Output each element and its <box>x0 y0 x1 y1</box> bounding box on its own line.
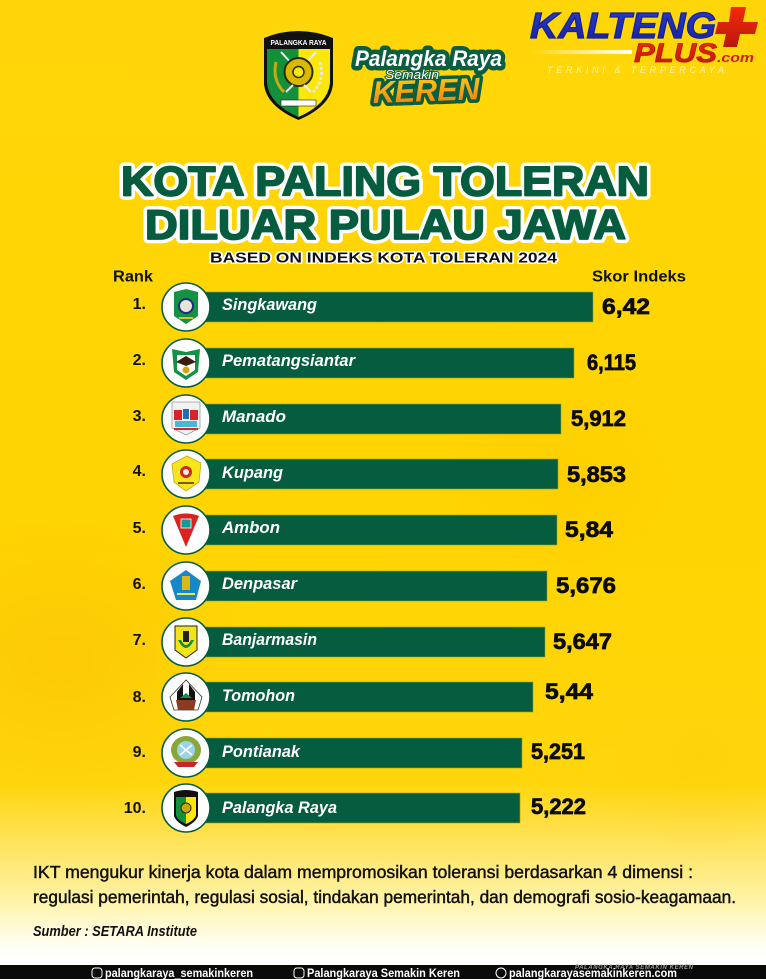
emblem: Banjarmasin <box>175 626 197 658</box>
logo: Palangka Raya Semakin Keren <box>355 46 502 110</box>
logo: Palangka Raya city shield: PALANGKA RAYA <box>270 38 327 47</box>
title: KOTA PALING TOLERAN <box>121 158 649 204</box>
row 2: Pematangsiantar <box>133 339 636 387</box>
logo: Palangka Raya Semakin Keren: Semakin <box>385 67 439 82</box>
row 8: Tomohon: 8. <box>133 689 146 706</box>
logo: Kalteng Plus: KALTENG <box>530 5 716 46</box>
row 8: Tomohon: 5,44 <box>545 679 594 704</box>
row 4: Kupang: 4. <box>133 463 146 480</box>
footer bar <box>0 965 766 979</box>
row 9: Pontianak: 9. <box>133 744 146 761</box>
ghost watermark: PALANGKA RAYA SEMAKIN KEREN <box>575 965 694 971</box>
row 7: Banjarmasin: Banjarmasin <box>222 631 317 649</box>
source: Sumber : SETARA Institute <box>33 924 197 940</box>
row 6: Denpasar: 6. <box>133 576 146 593</box>
row 2: Pematangsiantar: Pematangsiantar <box>222 352 357 370</box>
emblem: Pematangsiantar <box>172 349 200 380</box>
row 10: Palangka Raya: 5,222 <box>531 794 586 819</box>
row 9: Pontianak <box>133 729 585 777</box>
row 7: Banjarmasin: 5,647 <box>553 629 612 654</box>
row 2: Pematangsiantar: 6,115 <box>587 350 636 375</box>
emblem: Manado <box>172 402 200 435</box>
row 5: Ambon: Ambon <box>221 519 280 537</box>
row 4: Kupang: 5,853 <box>567 462 626 487</box>
row 4: Kupang: Kupang <box>222 464 283 482</box>
column header: rank: Rank <box>113 268 153 286</box>
row 8: Tomohon <box>133 673 594 721</box>
logo: Palangka Raya city shield <box>264 31 333 120</box>
row 4: Kupang <box>133 450 626 498</box>
emblem: Tomohon <box>170 680 202 710</box>
row 1: Singkawang: Singkawang <box>222 296 317 314</box>
row 6: Denpasar <box>133 562 616 610</box>
logo: Kalteng Plus <box>530 5 758 75</box>
row 3: Manado <box>133 395 626 443</box>
logo: Palangka Raya Semakin Keren: Palangka Raya <box>355 46 502 71</box>
icon: website <box>496 968 506 978</box>
row 9: Pontianak: 5,251 <box>531 739 585 764</box>
row 10: Palangka Raya <box>124 784 586 832</box>
icon: facebook <box>294 968 304 978</box>
row 1: Singkawang <box>133 283 650 331</box>
emblem: Denpasar <box>170 570 201 600</box>
row 10: Palangka Raya: 10. <box>124 800 146 817</box>
row 1: Singkawang: 1. <box>133 296 146 313</box>
logo: Kalteng Plus: PLUS <box>634 38 717 68</box>
title: DILUAR PULAU JAWA <box>145 201 626 248</box>
emblem: Ambon <box>173 514 199 547</box>
logo: Kalteng Plus: TERKINI & TERPERCAYA <box>547 65 724 75</box>
logo: Kalteng Plus: .com <box>717 50 755 65</box>
subtitle: BASED ON INDEKS KOTA TOLERAN 2024 <box>210 250 557 266</box>
row 10: Palangka Raya: Palangka Raya <box>222 799 337 817</box>
row 6: Denpasar: 5,676 <box>556 573 616 598</box>
row 2: Pematangsiantar: 2. <box>133 352 146 369</box>
emblem: Singkawang <box>174 289 198 324</box>
row 3: Manado: 3. <box>133 408 146 425</box>
logo: Palangka Raya Semakin Keren: KEREN <box>372 71 481 110</box>
row 5: Ambon: 5,84 <box>565 517 614 542</box>
title: KOTA PALING TOLERAN <box>121 158 649 204</box>
row 3: Manado: 5,912 <box>571 406 626 431</box>
row 5: Ambon <box>133 506 614 554</box>
emblem: Kupang <box>172 456 201 491</box>
explanation text <box>33 862 736 907</box>
icon: instagram <box>92 968 102 978</box>
row 7: Banjarmasin <box>133 618 612 666</box>
row 1: Singkawang: 6,42 <box>602 294 650 319</box>
column header: score: Skor Indeks <box>592 268 686 286</box>
row 3: Manado: Manado <box>222 408 286 426</box>
row 6: Denpasar: Denpasar <box>222 575 299 593</box>
row 8: Tomohon: Tomohon <box>222 687 295 705</box>
title: DILUAR PULAU JAWA <box>145 201 626 248</box>
row 9: Pontianak: Pontianak <box>222 743 301 761</box>
row 5: Ambon: 5. <box>133 520 146 537</box>
explanation text: regulasi pemerintah, regulasi sosial, tindakan pemerintah, dan demografi sosio-keagamaan. <box>33 887 736 907</box>
emblem: Pontianak <box>171 736 201 767</box>
emblem: Palangka Raya <box>174 790 198 827</box>
title <box>121 158 649 248</box>
row 7: Banjarmasin: 7. <box>133 632 146 649</box>
explanation text: IKT mengukur kinerja kota dalam mempromosikan toleransi berdasarkan 4 dimensi : <box>33 862 693 882</box>
